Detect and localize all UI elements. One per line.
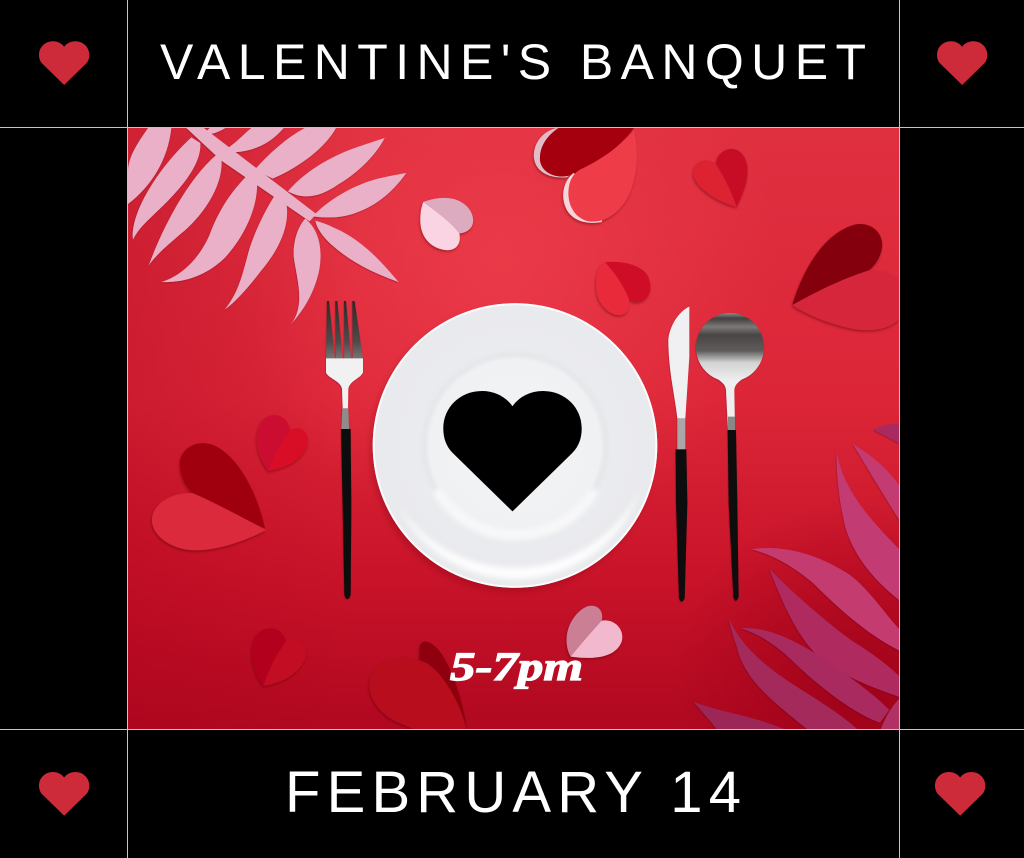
- paper heart: bottom center: [369, 642, 467, 732]
- knife: [668, 307, 689, 602]
- photo panel: red table setting: [128, 128, 903, 732]
- icon: heart, bottom right: [935, 772, 985, 816]
- paper heart: pale pink, bottom: [567, 606, 622, 658]
- pink paper leaf, top left: [128, 128, 406, 325]
- fork: [326, 301, 363, 599]
- title: VALENTINE'S BANQUET: [160, 34, 866, 90]
- time label: 5-7pm: [450, 644, 583, 689]
- paper heart: pale pink, top: [420, 198, 473, 250]
- date heading: FEBRUARY 14: [285, 760, 741, 825]
- paper heart: small red, above plate: [596, 262, 650, 315]
- magenta paper leaves, bottom right: [693, 424, 903, 732]
- icon: heart, bottom left: [39, 772, 89, 816]
- paper heart: small, left upper: [257, 415, 308, 471]
- spoon: [696, 313, 764, 601]
- paper heart: large, left: [152, 443, 265, 550]
- icon: heart, top right: [937, 41, 987, 85]
- icon: heart, top left: [39, 41, 89, 85]
- paper heart: large, right edge: [792, 224, 900, 330]
- white plate: [370, 303, 657, 592]
- paper heart: small red, top right: [693, 149, 748, 207]
- black heart on plate: [443, 391, 582, 511]
- paper heart: small, left lower: [252, 628, 306, 686]
- red paper backdrop: [128, 128, 899, 730]
- paper heart: large, top center: [534, 128, 637, 223]
